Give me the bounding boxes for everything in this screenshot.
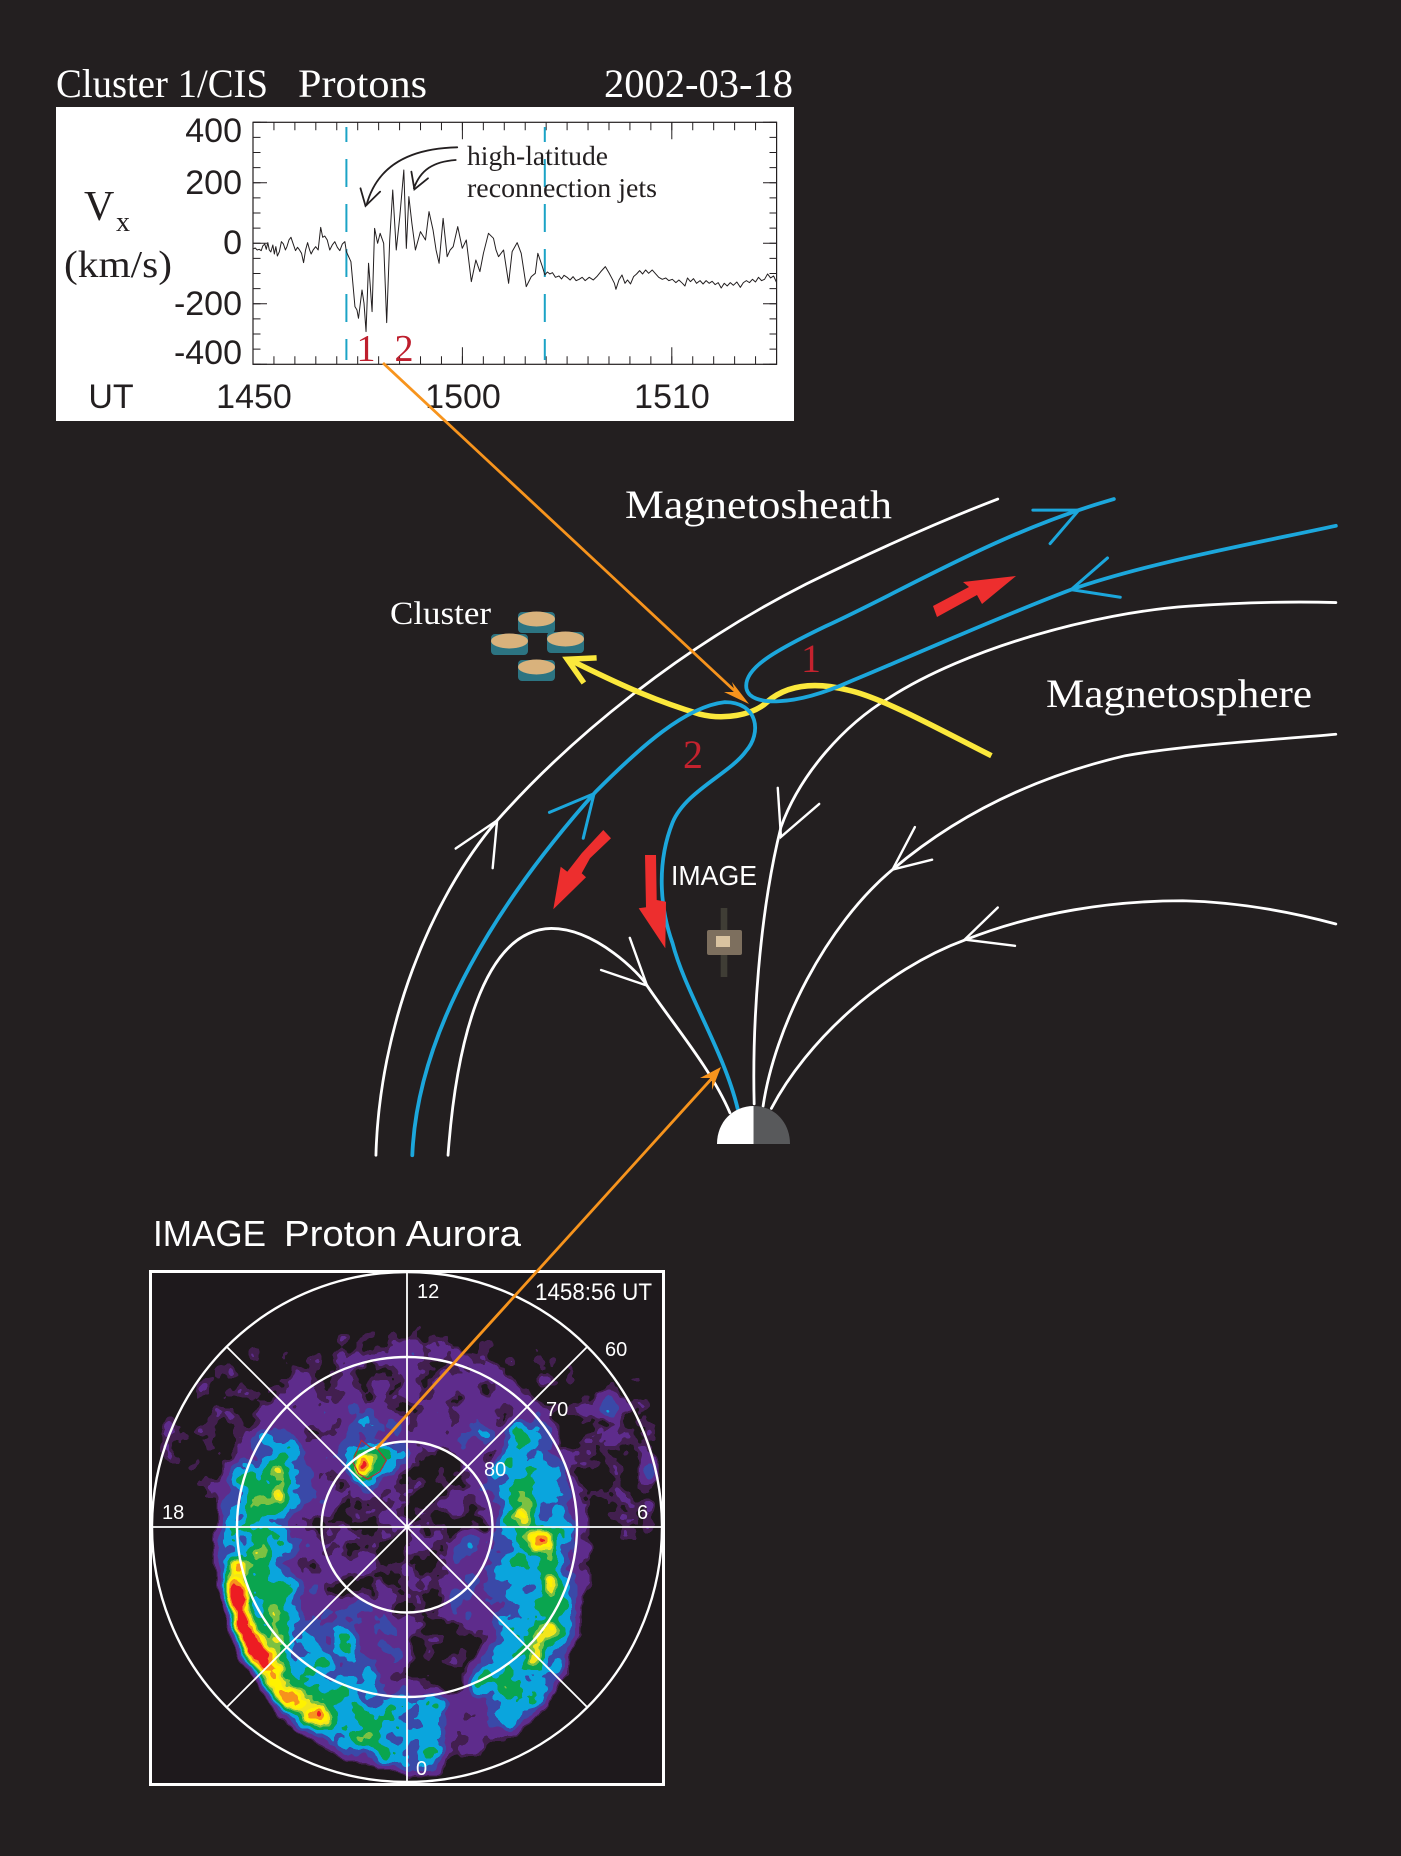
heading: date: 2002-03-18: [604, 61, 793, 106]
x axis labels: [88, 378, 710, 416]
label: Magnetosphere: Magnetosphere: [1046, 671, 1312, 716]
y axis labels: -400: [174, 334, 242, 372]
axis ticks: [252, 122, 778, 365]
time markers 1 and 2: 1: [356, 328, 376, 370]
heading: IMAGE Proton Aurora: Proton Aurora: [284, 1213, 522, 1254]
y axis labels: [174, 112, 242, 372]
time markers 1 and 2: [356, 328, 414, 370]
arrow: from time series to reconnection site: [383, 363, 749, 704]
dashed boundary lines: [346, 127, 545, 360]
heading: IMAGE Proton Aurora: [153, 1213, 522, 1254]
x axis labels: 1510: [634, 378, 710, 416]
y axis labels: -200: [174, 285, 242, 323]
cusp spot outline: [352, 1440, 386, 1479]
y axis title: V: [84, 184, 114, 230]
annotation text: high-latitude: [467, 141, 608, 171]
panel: Cluster proton velocity time series: [56, 61, 794, 421]
polar grid labels: 12: [417, 1281, 439, 1303]
plot border: [150, 1272, 664, 1784]
icon: Earth day and night: [717, 1106, 790, 1144]
red flow arrows: [553, 576, 1016, 948]
annotation arrows: [360, 147, 457, 206]
y axis labels: 400: [185, 112, 242, 150]
x axis labels: 1500: [425, 378, 501, 416]
label: Magnetosheath: Magnetosheath: [625, 482, 892, 527]
reconnected blue field lines with arrowheads: [412, 499, 1336, 1155]
panel: IMAGE proton aurora map: [149, 1220, 665, 1786]
yellow spacecraft trajectory arrow: [567, 658, 991, 756]
icon: Cluster spacecraft: [491, 612, 584, 681]
polar grid labels: 6: [637, 1502, 648, 1524]
arrow: from aurora spot to Earth: [376, 1067, 721, 1449]
y axis title: [64, 184, 172, 286]
polar grid labels: 70: [546, 1399, 568, 1421]
diagram markers 1 and 2: 1: [801, 636, 821, 681]
polar grid labels: [162, 1281, 648, 1780]
label: IMAGE: IMAGE: [671, 860, 757, 891]
diagram markers 1 and 2: 2: [683, 732, 703, 777]
x axis labels: UT: [88, 378, 134, 416]
polar grid labels: 80: [484, 1459, 506, 1481]
polar grid labels: 0: [416, 1758, 427, 1780]
heading: Cluster 1/CIS: Cluster 1/CIS: [56, 61, 268, 106]
y axis title: (km/s): [64, 244, 172, 286]
aurora intensity map: [160, 1326, 660, 1779]
y axis title: x: [116, 207, 130, 238]
white field lines with arrowheads: [376, 499, 1336, 1155]
icon: IMAGE spacecraft: [707, 908, 742, 977]
velocity trace: [253, 170, 777, 332]
chart background: [56, 107, 794, 421]
annotation text: [467, 141, 657, 203]
annotation text: reconnection jets: [467, 173, 657, 203]
polar grid labels: 60: [605, 1339, 627, 1361]
plot frame: [253, 122, 777, 364]
y axis labels: 0: [223, 224, 242, 262]
x axis labels: 1450: [216, 378, 292, 416]
heading: Protons: Protons: [298, 61, 427, 106]
label: Cluster: Cluster: [390, 596, 491, 632]
diagram markers 1 and 2: [683, 636, 821, 777]
time markers 1 and 2: 2: [394, 328, 414, 370]
diagram: magnetic field lines: [376, 482, 1336, 1155]
polar grid: [150, 1271, 664, 1785]
polar grid labels: 18: [162, 1502, 184, 1524]
heading: IMAGE Proton Aurora: IMAGE: [153, 1213, 266, 1254]
y axis labels: 200: [185, 164, 242, 202]
chart: Vx line plot: [252, 122, 778, 370]
timestamp: 1458:56 UT: [535, 1279, 652, 1306]
